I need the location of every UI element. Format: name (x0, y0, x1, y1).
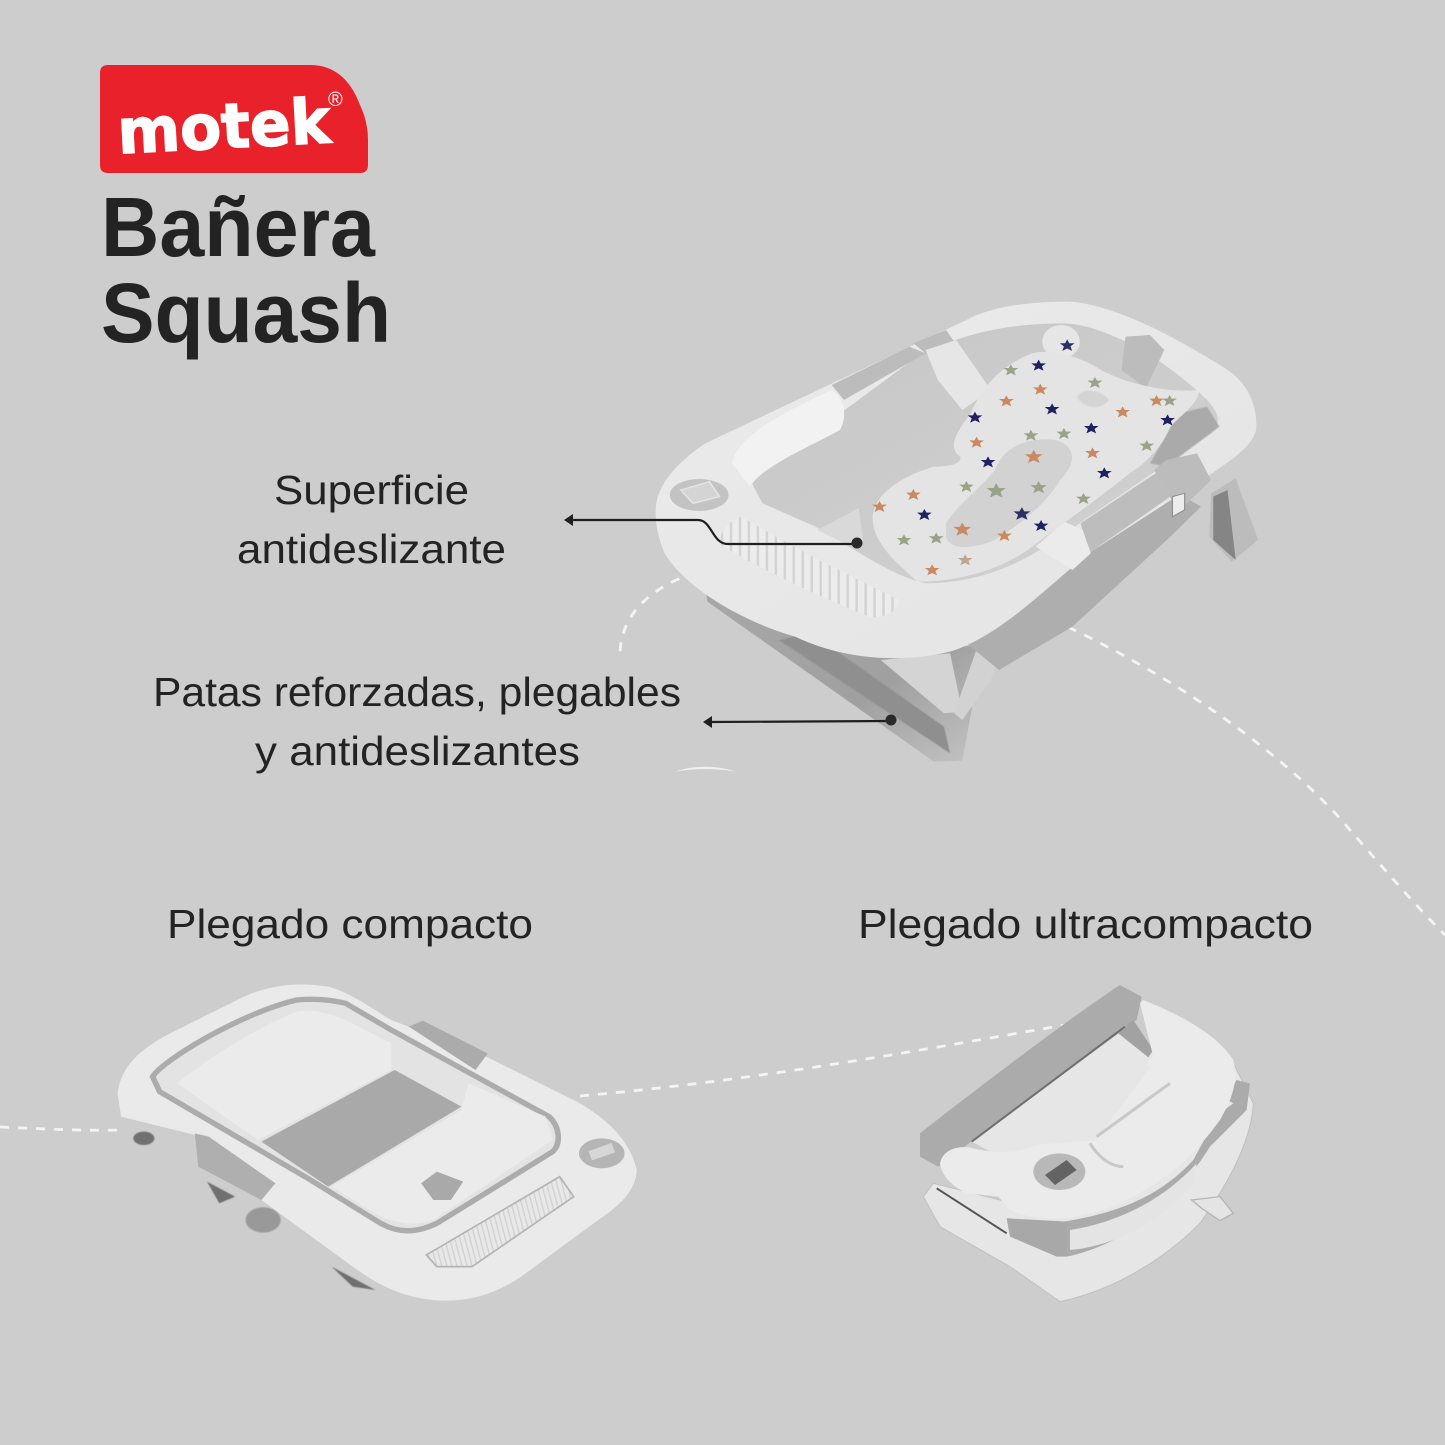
seat stars (872, 339, 1177, 575)
bath seat cushion (872, 325, 1199, 582)
fold band (937, 1080, 1250, 1257)
ribbed soap tray (718, 517, 899, 617)
outer shell (118, 984, 637, 1301)
top shell (940, 1000, 1235, 1218)
label: superficie antideslizante: Superficie (274, 467, 469, 513)
product image: compact fold (118, 984, 637, 1301)
lower tray (332, 1083, 553, 1224)
grey band (920, 985, 1142, 1167)
label: patas reforzadas: y antideslizantes (255, 728, 580, 774)
star mark (421, 1172, 463, 1200)
small base highlight (675, 767, 736, 772)
inner panel (1013, 1045, 1150, 1145)
dashed connector path (0, 572, 1445, 1130)
straps (195, 1021, 488, 1200)
display circle (1033, 1153, 1085, 1190)
handle ridge (1090, 1083, 1170, 1167)
label: patas reforzadas (153, 669, 681, 774)
leader line: patas (703, 714, 896, 728)
label: superficie antideslizante: antideslizante (237, 526, 506, 572)
label: plegado ultracompacto: Plegado ultracompacto (858, 901, 1313, 947)
label: superficie antideslizante (237, 467, 506, 572)
tub rim (656, 302, 1256, 658)
title: Squash (101, 266, 391, 360)
rim grey section (832, 347, 926, 400)
inner basin (750, 323, 1218, 583)
legs (705, 587, 1001, 762)
display circle (670, 479, 729, 511)
leader line: superficie antideslizante (564, 514, 862, 548)
logo: motek: ® (328, 89, 343, 111)
label: patas reforzadas: Patas reforzadas, plegables (153, 669, 681, 715)
inner frame (153, 999, 558, 1231)
rear leg (1209, 478, 1258, 562)
ribbed tray (426, 1177, 574, 1267)
centre band (261, 1070, 461, 1187)
basin shadow patch (1150, 407, 1219, 467)
inner base fill (972, 1020, 1233, 1203)
recess grey block (1118, 1020, 1153, 1057)
logo: motek (100, 65, 368, 173)
upper tray (177, 1011, 391, 1140)
label: plegado compacto: Plegado compacto (167, 901, 533, 947)
straps (913, 330, 1211, 570)
dark band edge (972, 1027, 1125, 1142)
logo: motek: motek (116, 84, 334, 169)
product image: ultracompact fold (920, 985, 1253, 1302)
outer body side (966, 477, 1201, 670)
lower shell (923, 1063, 1253, 1302)
title: Bañera (101, 180, 376, 274)
rim left highlight (732, 390, 844, 487)
feet (133, 1132, 375, 1290)
side tab (1192, 1197, 1233, 1221)
main product image: open bathtub (656, 302, 1258, 772)
title (101, 180, 391, 360)
display circle (579, 1138, 625, 1168)
basin light block (817, 508, 864, 543)
